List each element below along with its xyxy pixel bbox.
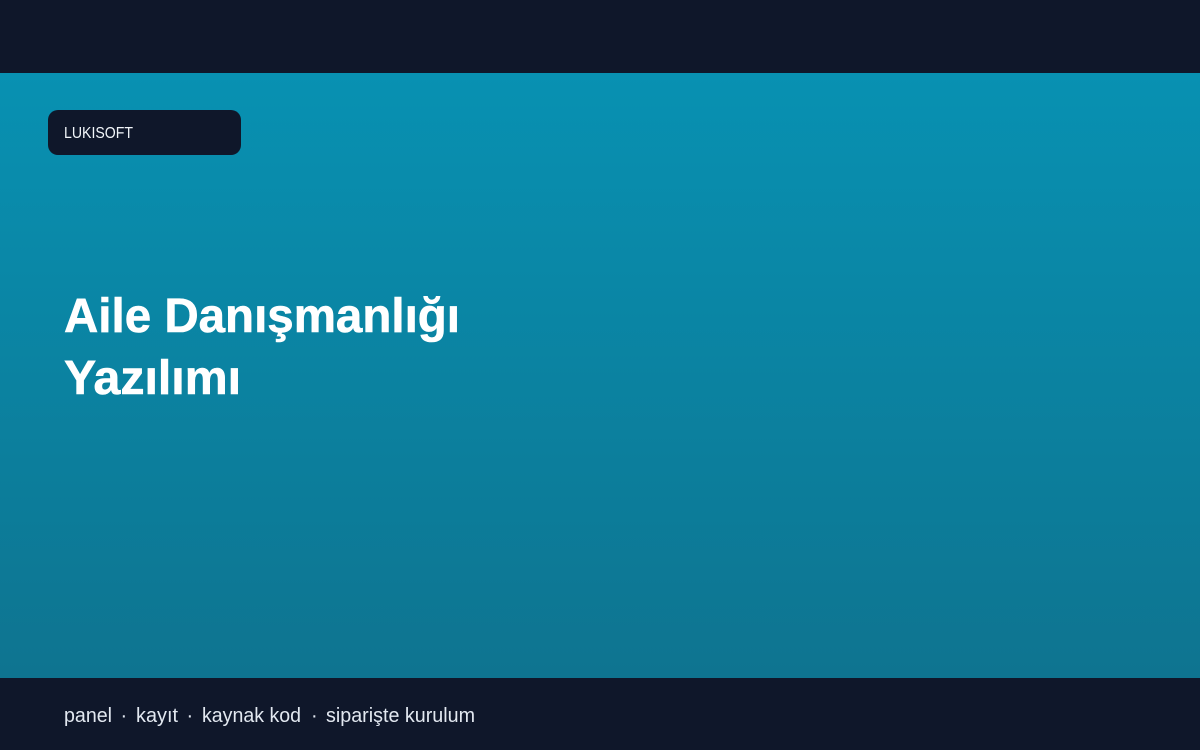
footer feature list: kayıt — [136, 705, 178, 727]
footer feature list — [64, 705, 475, 727]
footer feature list: · — [120, 705, 127, 727]
footer feature list: kaynak kod — [202, 705, 301, 727]
footer bar — [0, 678, 1200, 750]
title: Aile Danışmanlığı — [64, 290, 460, 343]
title — [64, 290, 460, 405]
brand badge — [48, 110, 241, 155]
footer feature list: · — [186, 705, 193, 727]
footer feature list: · — [311, 705, 318, 727]
footer feature list: panel — [64, 705, 112, 727]
top bar — [0, 0, 1200, 73]
footer feature list: siparişte kurulum — [326, 705, 475, 727]
brand badge: LUKISOFT — [64, 125, 133, 142]
title: Yazılımı — [64, 352, 241, 405]
